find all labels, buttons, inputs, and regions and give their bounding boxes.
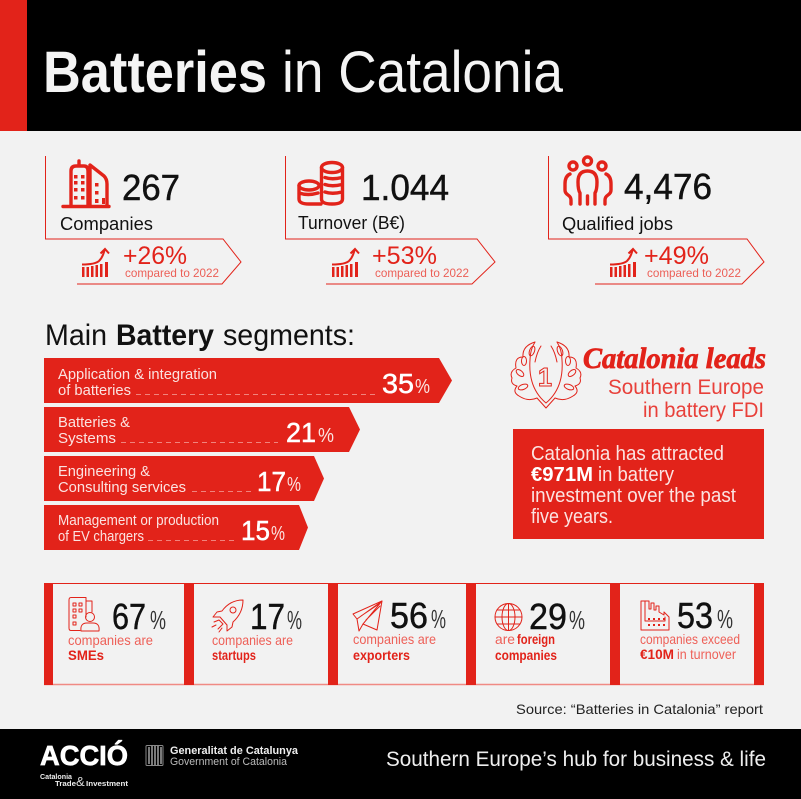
icon: buildings bbox=[63, 161, 109, 206]
comparison note: compared to 2022 bbox=[647, 266, 741, 280]
stat: exceed 10M turnover 53%: in turnover bbox=[677, 646, 736, 662]
callout: investment: investment over the past bbox=[531, 485, 736, 507]
comparison note: compared to 2022 bbox=[125, 266, 219, 280]
stat: exporters 56%: companies are bbox=[353, 631, 436, 647]
stat: exporters 56%: exporters bbox=[353, 647, 410, 663]
stat: SMEs 67%: companies are bbox=[68, 632, 153, 648]
KPI card: jobs bbox=[548, 156, 764, 284]
logo: Generalitat de Catalunya: Generalitat de Catalunya bbox=[170, 745, 299, 757]
header band bbox=[0, 0, 801, 131]
subheading: Southern Europe in battery FDI bbox=[608, 376, 764, 422]
stat: startups 17% bbox=[212, 596, 302, 663]
footer band bbox=[0, 729, 801, 799]
bar: engineering and consulting 17%: 17 bbox=[257, 466, 286, 497]
bar: batteries and systems 21%: Batteries & bbox=[58, 414, 130, 431]
bar: EV chargers 15%: of EV chargers bbox=[58, 528, 144, 545]
callout: investment: five years. bbox=[531, 506, 613, 528]
stat: foreign companies 29%: % bbox=[569, 605, 585, 635]
heading: Catalonia leads: Catalonia leads bbox=[583, 342, 766, 375]
growth: +53%: +53% bbox=[372, 242, 437, 270]
stat: startups 17%: % bbox=[287, 605, 302, 635]
bar: engineering and consulting 17% bbox=[44, 456, 324, 501]
stat: exporters 56% bbox=[353, 595, 446, 663]
stat: exporters 56%: % bbox=[431, 604, 446, 634]
icon: people bbox=[565, 157, 611, 204]
icon: paper plane bbox=[353, 601, 382, 631]
comparison note: compared to 2022 bbox=[375, 266, 469, 280]
icon: growth chart bbox=[332, 249, 359, 277]
stat: exceed 10M turnover 53% bbox=[640, 595, 740, 662]
bar: application and integration 35% bbox=[44, 358, 452, 403]
value: 267: 267 bbox=[122, 167, 180, 208]
stat: SMEs 67%: % bbox=[150, 605, 166, 635]
label: Turnover: Turnover (B€) bbox=[298, 213, 405, 233]
stat: SMEs 67%: SMEs bbox=[68, 647, 104, 663]
callout: investment: in battery bbox=[598, 464, 674, 486]
bar: engineering and consulting 17%: Engineering & bbox=[58, 463, 150, 480]
logo: ACCIÓ: Catalonia bbox=[40, 772, 73, 781]
bar: EV chargers 15%: 15 bbox=[241, 515, 270, 546]
heading: main battery segments: Battery bbox=[116, 319, 214, 352]
logo: Generalitat de Catalunya: Government of Catalonia bbox=[170, 756, 288, 768]
bar: application and integration 35%: of batteries bbox=[58, 382, 131, 399]
icon: factory bbox=[641, 601, 669, 630]
stat: startups 17%: startups bbox=[212, 647, 256, 663]
heading: main battery segments: Main bbox=[45, 319, 107, 352]
stat: startups 17%: 17 bbox=[250, 596, 285, 637]
slogan: Southern Europe’s hub for business & life bbox=[386, 748, 766, 771]
logo: ACCIÓ: Trade bbox=[55, 779, 76, 788]
bar: batteries and systems 21% bbox=[44, 407, 360, 452]
logo: Generalitat emblem bbox=[146, 746, 163, 766]
logo: ACCIÓ: ACCIÓ bbox=[40, 740, 128, 771]
bar: application and integration 35%: % bbox=[415, 376, 430, 398]
logo: ACCIÓ: Investment bbox=[86, 779, 129, 788]
stat: exceed 10M turnover 53%: 53 bbox=[677, 595, 713, 636]
subheading: Southern Europe in battery FDI: Southern Europe bbox=[608, 376, 764, 399]
bar: EV chargers 15%: % bbox=[271, 523, 285, 545]
stat: foreign companies 29%: are bbox=[495, 631, 515, 647]
icon: coins bbox=[299, 162, 342, 204]
callout: investment bbox=[513, 429, 764, 539]
stats strip frame bbox=[44, 583, 764, 685]
stat: foreign companies 29%: 29 bbox=[529, 596, 567, 637]
stat: foreign companies 29%: companies bbox=[495, 647, 557, 663]
bar: EV chargers 15% bbox=[44, 505, 308, 550]
bar: application and integration 35%: 35 bbox=[382, 368, 414, 399]
heading: main battery segments: segments: bbox=[223, 319, 355, 352]
label: Companies: Companies bbox=[60, 214, 153, 234]
icon: globe bbox=[495, 604, 522, 630]
icon: laurel with number one bbox=[511, 342, 581, 408]
bar: engineering and consulting 17%: Consulting services bbox=[58, 479, 186, 496]
bar: application and integration 35%: Application & integration bbox=[58, 366, 217, 383]
icon: growth chart bbox=[610, 249, 637, 277]
stat: SMEs 67%: 67 bbox=[112, 596, 146, 637]
growth: +49%: +49% bbox=[644, 242, 709, 270]
value: 4,476: 4,476 bbox=[624, 166, 712, 207]
icon: rocket bbox=[212, 600, 243, 632]
callout: investment: Catalonia has attracted bbox=[531, 443, 724, 465]
stat: SMEs 67% bbox=[68, 596, 166, 663]
stat: startups 17%: companies are bbox=[212, 632, 293, 648]
icon: office and person bbox=[69, 598, 99, 631]
title: Batteries bbox=[43, 40, 267, 105]
bar: EV chargers 15%: Management or production bbox=[58, 512, 219, 529]
logo: ACCIÓ bbox=[40, 740, 129, 789]
KPI card: companies bbox=[46, 156, 241, 284]
growth: +26%: +26% bbox=[123, 242, 187, 270]
logo: ACCIÓ: & bbox=[76, 774, 85, 789]
stat: exceed 10M turnover 53%: % bbox=[717, 604, 733, 634]
stat: exceed 10M turnover 53%: companies exceed bbox=[640, 631, 740, 647]
icon: laurel with number one: 1 bbox=[538, 362, 552, 392]
bar: engineering and consulting 17%: % bbox=[287, 474, 301, 496]
logo: Generalitat de Catalunya bbox=[170, 745, 299, 768]
stat: foreign companies 29%: foreign bbox=[517, 631, 555, 647]
bar: batteries and systems 21%: 21 bbox=[286, 417, 316, 448]
source note: Source: “Batteries in Catalonia” report bbox=[516, 701, 763, 717]
callout: investment: €971M bbox=[531, 464, 593, 486]
KPI card: turnover bbox=[286, 156, 495, 284]
value: 1.044: 1.044 bbox=[361, 167, 449, 208]
header band: in Catalonia bbox=[282, 40, 564, 105]
bar: batteries and systems 21%: Systems bbox=[58, 430, 116, 447]
bar: batteries and systems 21%: % bbox=[318, 425, 334, 447]
icon: growth chart bbox=[82, 249, 109, 277]
subheading: Southern Europe in battery FDI: in battery FDI bbox=[643, 399, 764, 422]
heading: main battery segments bbox=[45, 319, 355, 352]
label: Qualified jobs: Qualified jobs bbox=[562, 214, 673, 234]
stat: exceed 10M turnover 53%: €10M bbox=[640, 646, 674, 662]
stat: exporters 56%: 56 bbox=[390, 595, 428, 636]
stat: foreign companies 29% bbox=[495, 596, 585, 663]
